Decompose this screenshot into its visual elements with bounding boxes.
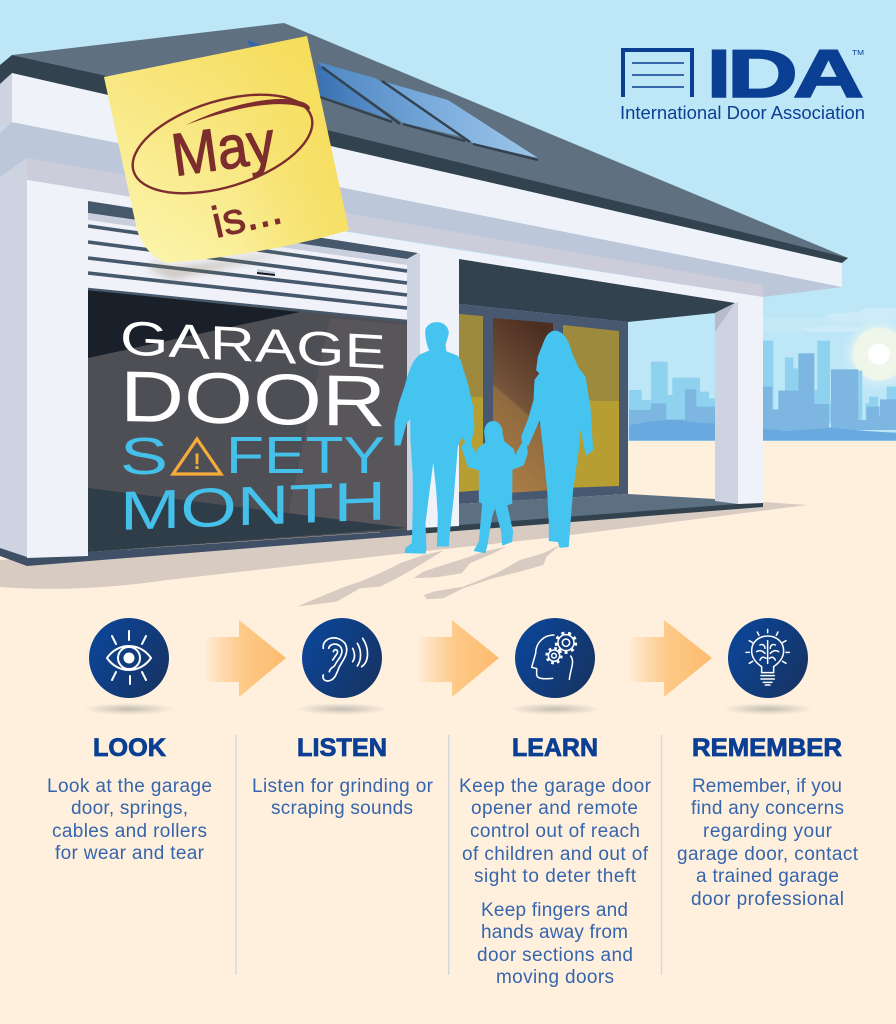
distant hills xyxy=(629,420,896,441)
text: look description xyxy=(47,776,212,864)
column: LEARN xyxy=(459,734,652,988)
garage door mark xyxy=(623,50,692,97)
text: remember description: find any concerns xyxy=(691,798,844,819)
icon: ear xyxy=(302,618,382,698)
garage interior xyxy=(88,289,407,552)
text: remember description xyxy=(677,776,859,910)
icon: head with gears xyxy=(515,618,595,698)
word: SAFETY, letters FETY: FETY xyxy=(226,427,385,485)
column: LOOK xyxy=(47,734,212,864)
patio pillar xyxy=(715,297,763,504)
text: look description: Look at the garage xyxy=(47,776,212,797)
text: learn first tip xyxy=(459,776,652,887)
warning triangle: ! xyxy=(193,449,201,474)
family shadows xyxy=(297,545,560,607)
solar panels xyxy=(247,40,538,160)
icon: eye xyxy=(89,618,169,698)
heading: REMEMBER: REMEMBER xyxy=(692,734,842,762)
left wall xyxy=(0,158,27,566)
text: look description: cables and rollers xyxy=(52,821,207,842)
text: learn first tip: Keep the garage door xyxy=(459,776,652,797)
ground xyxy=(0,441,896,1024)
circled May xyxy=(121,76,324,212)
text: learn first tip: opener and remote xyxy=(471,798,638,819)
sun xyxy=(841,316,896,392)
text: listen description xyxy=(252,776,434,819)
mid buildings xyxy=(629,353,896,430)
IDA wordmark: A xyxy=(793,36,864,112)
note paper xyxy=(104,36,349,263)
roof edge xyxy=(0,55,848,263)
father xyxy=(395,323,474,553)
column: REMEMBER xyxy=(677,734,859,910)
association name: International Door Association xyxy=(620,102,865,123)
family silhouette xyxy=(395,323,593,553)
fascia shaded left xyxy=(0,73,12,132)
arrow 3 xyxy=(627,620,712,697)
circled May: May xyxy=(167,108,279,189)
warning triangle xyxy=(173,439,221,474)
entry door xyxy=(493,318,553,494)
roof xyxy=(0,23,848,263)
column: LISTEN xyxy=(252,734,434,819)
text: learn first tip: of children and out of xyxy=(462,844,649,865)
text: learn second tip: moving doors xyxy=(496,967,614,988)
patio floor edge xyxy=(380,502,763,537)
text: remember description: regarding your xyxy=(703,821,833,842)
IDA wordmark: I xyxy=(707,36,731,112)
base strip xyxy=(0,530,413,566)
heading: LOOK: LOOK xyxy=(93,734,166,762)
icon: light bulb with brain xyxy=(728,618,808,698)
soffit band xyxy=(0,122,842,297)
text: learn second tip: hands away from xyxy=(481,922,628,943)
text: learn second tip xyxy=(477,900,633,988)
word: GARAGE: GARAGE xyxy=(120,312,386,380)
child xyxy=(462,422,527,553)
is...: is... xyxy=(207,184,286,248)
text: remember description: door professional xyxy=(691,889,844,910)
mother xyxy=(522,331,593,547)
text: learn first tip: control out of reach xyxy=(470,821,640,842)
text: look description: for wear and tear xyxy=(55,843,205,864)
sticky note xyxy=(104,36,349,280)
left window xyxy=(459,314,483,492)
title: Garage Door Safety Month xyxy=(120,312,386,542)
heading: LEARN: LEARN xyxy=(512,734,598,762)
note shadow xyxy=(148,250,300,280)
heading: LISTEN: LISTEN xyxy=(297,734,387,762)
left pillar and lintel xyxy=(27,180,763,558)
sky xyxy=(0,0,896,445)
patio back wall xyxy=(459,304,628,504)
clouds xyxy=(763,307,896,332)
building xyxy=(0,73,842,566)
arrow 1 xyxy=(203,620,286,697)
text: learn second tip: Keep fingers and xyxy=(481,900,628,921)
ground shadow of building xyxy=(0,502,807,589)
door slats xyxy=(88,201,418,322)
word: SAFETY, letter S: S xyxy=(120,428,168,486)
light buildings xyxy=(629,341,896,423)
fascia xyxy=(12,73,842,287)
text: listen description: scraping sounds xyxy=(271,798,413,819)
father shadow xyxy=(297,551,443,607)
word: MONTH: MONTH xyxy=(120,469,386,542)
centre pillar xyxy=(407,250,459,531)
IDA logo xyxy=(620,36,865,123)
arrow 2 xyxy=(416,620,499,697)
trademark: TM xyxy=(852,48,864,57)
IDA wordmark xyxy=(707,36,864,112)
left pillar face xyxy=(27,180,88,558)
IDA wordmark: D xyxy=(727,36,798,112)
column dividers xyxy=(236,735,662,975)
text: listen description: Listen for grinding or xyxy=(252,776,434,797)
roof top xyxy=(12,23,848,262)
child shadow xyxy=(413,547,507,578)
right window xyxy=(563,325,619,488)
city skyline xyxy=(629,307,896,441)
text: remember description: a trained garage xyxy=(696,866,839,887)
text: learn first tip: sight to deter theft xyxy=(474,866,637,887)
text: look description: door, springs, xyxy=(71,798,188,819)
mother shadow xyxy=(424,545,560,599)
patio floor xyxy=(459,494,763,530)
door handle xyxy=(257,269,275,276)
lilac soffit band xyxy=(27,158,763,297)
step shadows xyxy=(83,703,814,715)
text: remember description: garage door, contact xyxy=(677,844,859,865)
text: remember description: Remember, if you xyxy=(692,776,842,797)
text: learn second tip: door sections and xyxy=(477,945,633,966)
word: DOOR: DOOR xyxy=(120,357,386,442)
patio ceiling xyxy=(459,259,735,322)
